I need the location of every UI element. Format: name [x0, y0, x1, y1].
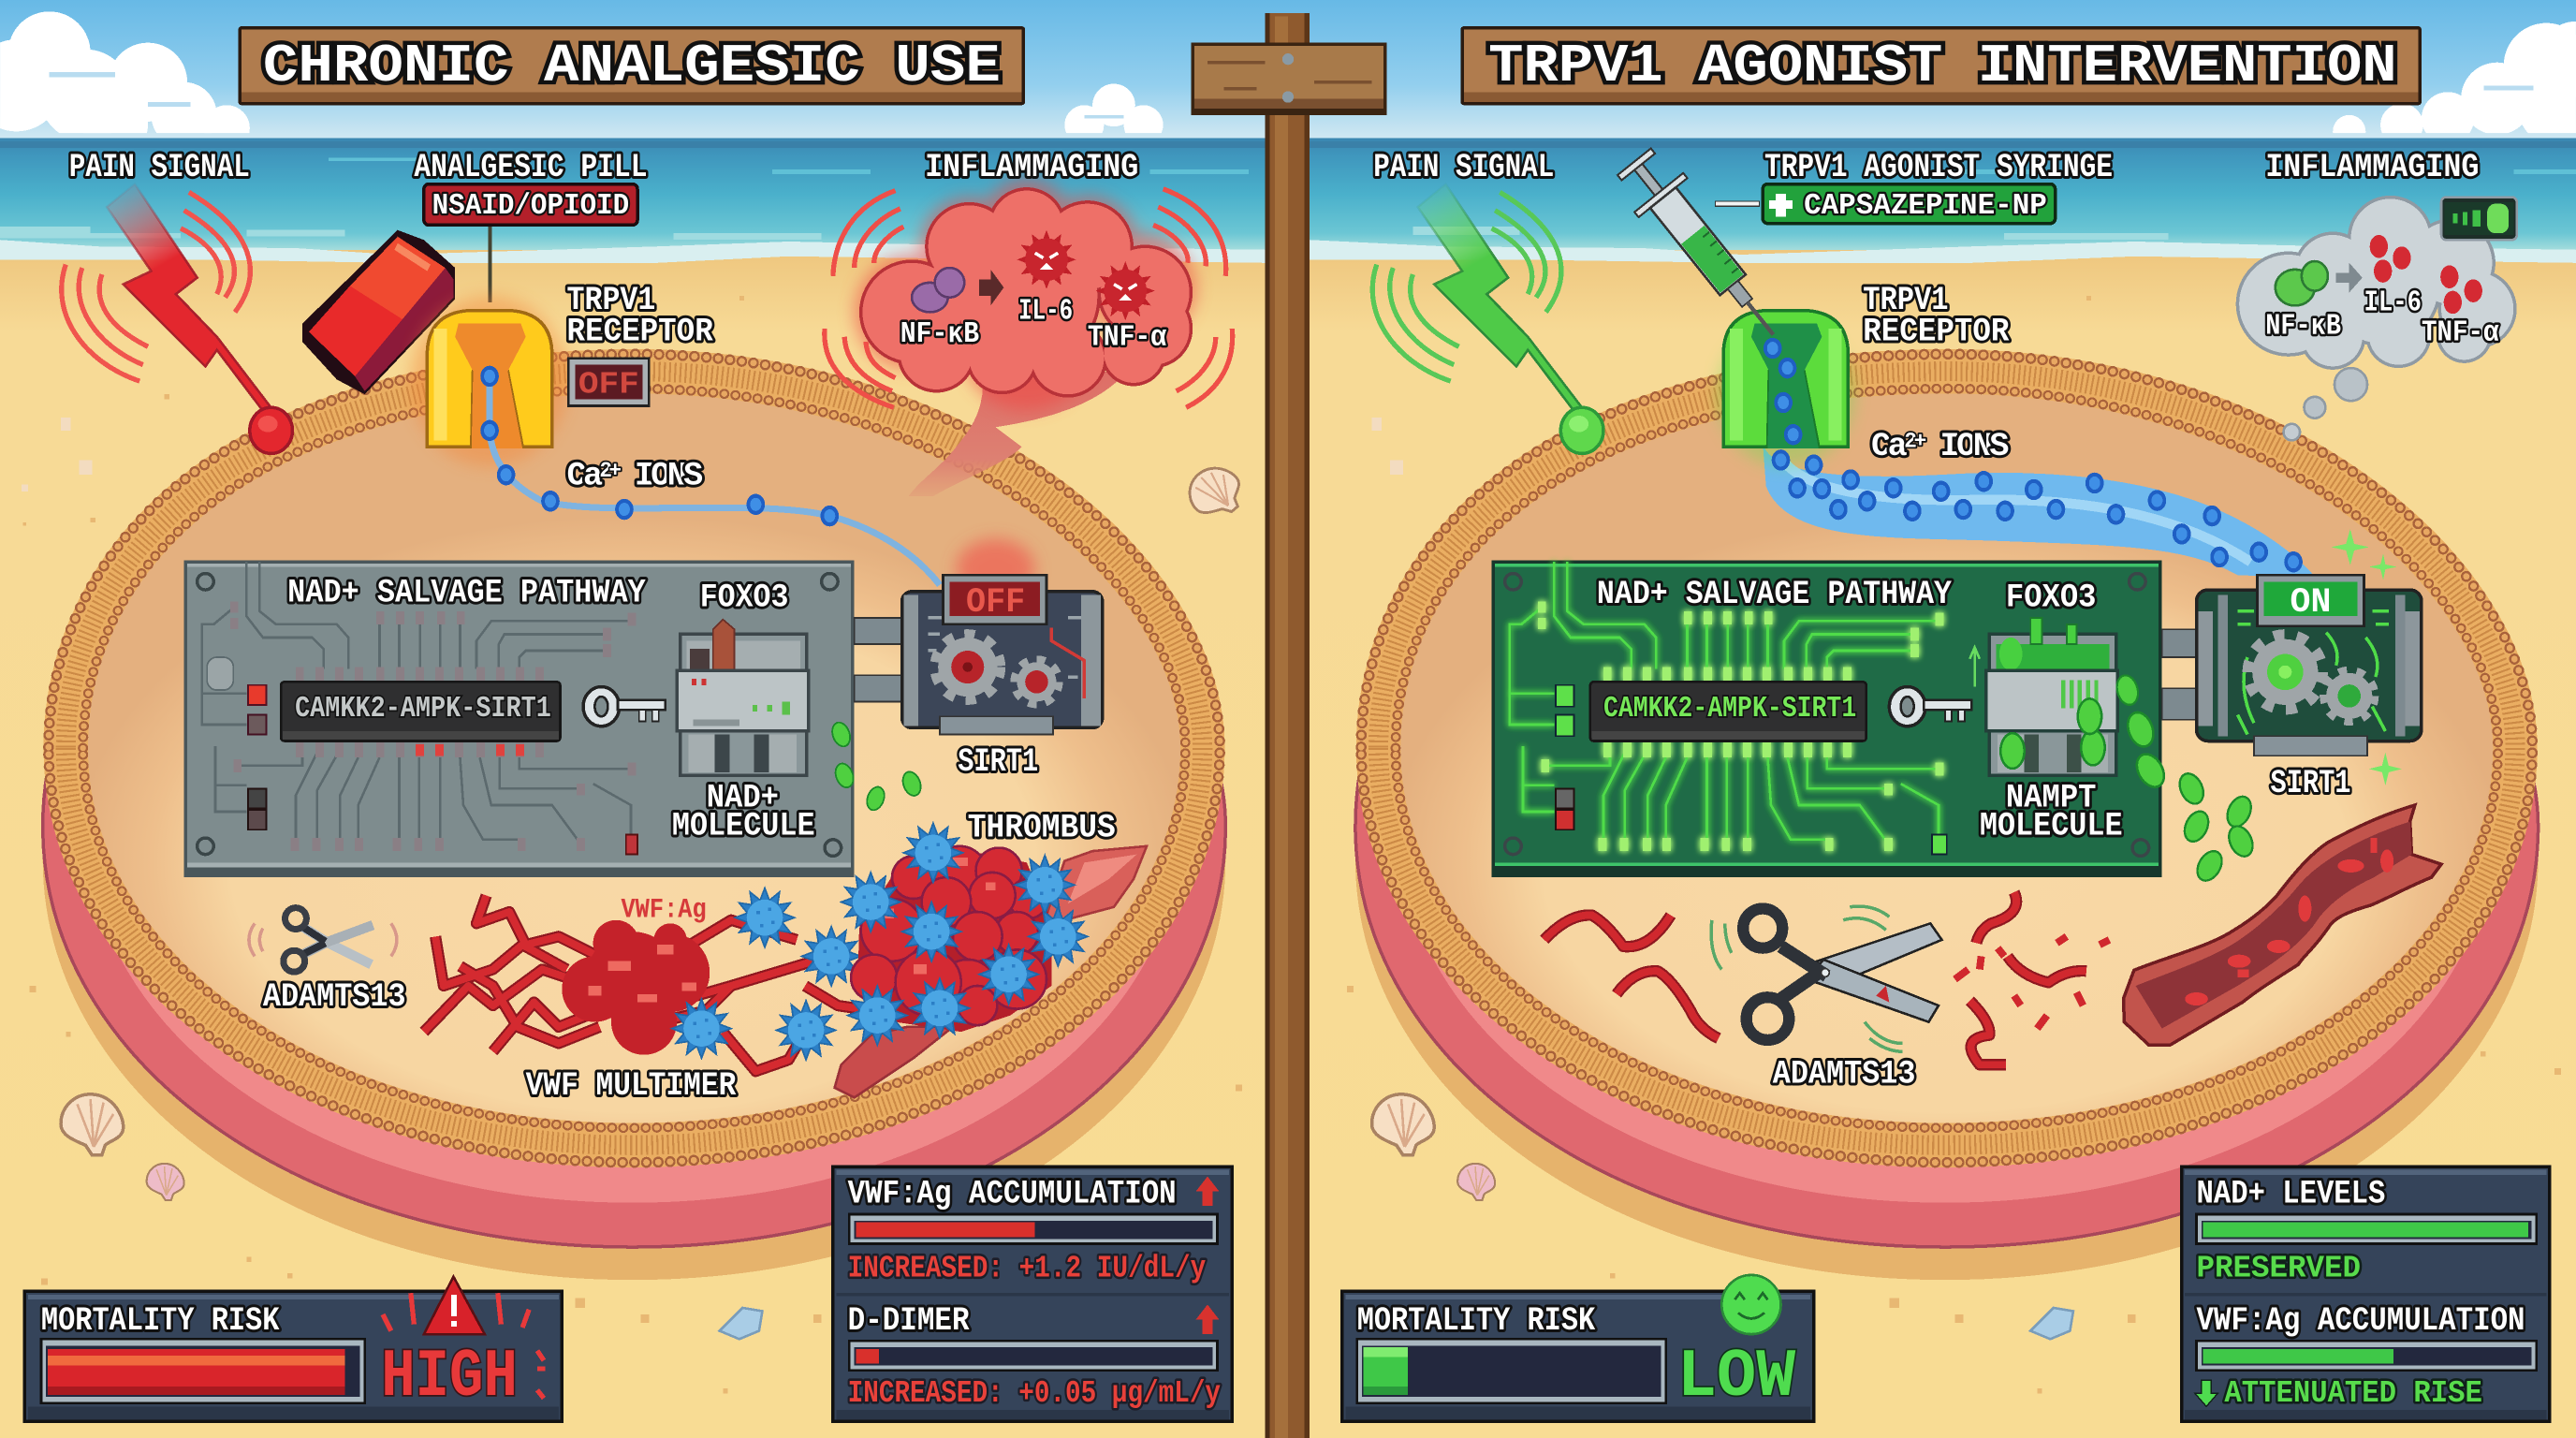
chip: CAMKK2-AMPK-SIRT1: [281, 682, 561, 741]
status: mortality risk high: [24, 1277, 562, 1421]
label: NAD+ molecule: MOLECULE: [672, 808, 815, 845]
molecules: escaping NAD+: [828, 719, 925, 814]
label: TNF-alpha: TNF-α: [1088, 322, 1166, 355]
label: VWF accumulation: VWF:Ag ACCUMULATION: [848, 1176, 1177, 1213]
cloud: inflammaging grey: [2236, 196, 2517, 440]
label: Ca2+ ions: 2+: [1904, 429, 1926, 453]
healthy vessel: [2124, 805, 2441, 1045]
label: NAMPT molecule: [1980, 780, 2123, 845]
title: chronic analgesic use: CHRONIC ANALGESIC USE: [263, 37, 1001, 97]
label: FOXO3: FOXO3: [2006, 580, 2096, 617]
bar: mortality high: [41, 1339, 365, 1403]
icon: IL-6: [1017, 230, 1076, 289]
label: TRPV1 receptor: TRPV1: [1863, 282, 1949, 319]
label: Ca2+ ions: Ca: [567, 458, 603, 495]
icon: low battery: [2441, 198, 2517, 240]
icon: TNF-alpha dots: [2440, 265, 2482, 314]
panel: NAD+ salvage circuit board active: [1492, 560, 2162, 877]
chip: CAMKK2-AMPK-SIRT1: [1590, 682, 1866, 741]
label: TRPV1 receptor: RECEPTOR: [1863, 313, 2010, 350]
arrow: NF-kB to IL-6: [979, 270, 1003, 305]
label: TRPV1 receptor: TRPV1: [567, 282, 655, 319]
label: D-dimer: D-DIMER: [848, 1302, 970, 1340]
label: SIRT1: SIRT1: [2271, 765, 2351, 802]
chip: CAMKK2-AMPK-SIRT1: CAMKK2-AMPK-SIRT1: [1603, 693, 1856, 726]
label: pain signal: PAIN SIGNAL: [1373, 149, 1554, 186]
icon: syringe: [1610, 142, 1797, 355]
arrow: attenuated down: [2195, 1380, 2217, 1406]
icon: key: [583, 687, 666, 726]
value: attenuated rise: ATTENUATED RISE: [2224, 1376, 2482, 1412]
label: NAMPT molecule: MOLECULE: [1980, 808, 2123, 845]
label: TNF-alpha: TNF-α: [2422, 316, 2498, 349]
value: VWF increase: INCREASED: +1.2 IU/dL/y: [848, 1252, 1206, 1287]
label: ADAMTS13: ADAMTS13: [1773, 1056, 1915, 1093]
label: inflammaging: INFLAMMAGING: [925, 149, 1138, 186]
label: SIRT1: SIRT1: [958, 743, 1038, 781]
label: NAD+ molecule: NAD+: [707, 780, 779, 817]
label: HIGH: HIGH: [381, 1339, 518, 1416]
label: VWF:Ag: VWF:Ag: [621, 893, 707, 925]
badge: SIRT1 on: [2257, 575, 2364, 626]
icon: TNF-alpha: [1096, 261, 1155, 320]
badge: SIRT1 on: ON: [2291, 583, 2331, 623]
label: NF-kB: NF-κB: [900, 318, 979, 351]
thrombus: [842, 823, 1088, 1045]
receptor: TRPV1 on: [1717, 311, 1854, 466]
icon: pain signal bolt: [62, 184, 292, 453]
icon: analgesic pill: [302, 230, 455, 394]
strands: cleaved VWF: [1544, 892, 2110, 1064]
icon: gears on: [2249, 636, 2374, 721]
machine: SIRT1 on: [2162, 575, 2422, 756]
bar: VWF: [849, 1214, 1218, 1244]
value: D-dimer increase: INCREASED: +0.05 µg/mL/y: [848, 1376, 1221, 1412]
status: mortality risk low: [1342, 1275, 1814, 1421]
value: preserved: PRESERVED: [2197, 1252, 2361, 1287]
label: NAMPT molecule: NAMPT: [2006, 780, 2096, 817]
decoration: shells and pebble: [1372, 1094, 2073, 1339]
label: Ca2+ ions: IONS: [618, 458, 703, 495]
label: thrombus: THROMBUS: [968, 809, 1116, 846]
label: LOW: LOW: [1677, 1339, 1796, 1416]
label: VWF multimer: VWF MULTIMER: [526, 1067, 737, 1105]
label: TRPV1 receptor: [567, 282, 714, 350]
badge: SIRT1 off: [943, 575, 1046, 624]
label: VWF accumulation: VWF:Ag ACCUMULATION: [2197, 1302, 2525, 1340]
label: pathway title: NAD+ SALVAGE PATHWAY: [1597, 576, 1952, 613]
panel: chronic analgesic use: [24, 149, 1251, 1421]
icon: warning triangle: [383, 1277, 546, 1399]
decoration: shells and pebble: [61, 457, 1251, 1339]
river: calcium ion flow: [1763, 444, 2317, 579]
label: inflammaging: INFLAMMAGING: [2265, 149, 2479, 186]
label: IL-6: IL-6: [1018, 295, 1073, 328]
icon: key: [1889, 687, 1971, 726]
panel: NAD+ salvage circuit board: [184, 560, 855, 877]
badge: SIRT1 off: OFF: [966, 583, 1025, 623]
module: FOXO3 locked: [677, 620, 809, 775]
bar: NAD+ levels: [2197, 1214, 2537, 1244]
ions: dense calcium beads: [1764, 338, 2303, 572]
bar: VWF attenuated: [2197, 1341, 2537, 1371]
icon: active scissors: [1711, 906, 1942, 1051]
label: Ca2+ ions: IONS: [1924, 428, 2009, 465]
bar: mortality low: [1357, 1339, 1666, 1403]
badge: receptor off: OFF: [578, 367, 639, 403]
label: syringe: TRPV1 AGONIST SYRINGE: [1764, 149, 2113, 186]
label: TRPV1 receptor: RECEPTOR: [567, 313, 714, 350]
badge: receptor off: [568, 359, 649, 405]
status: NAD+ levels and VWF: [2182, 1167, 2550, 1421]
label: TRPV1 receptor: [1863, 282, 2010, 350]
callout: capsazepine-np: [1715, 184, 2056, 224]
label: Ca2+ ions: Ca: [1871, 428, 1908, 465]
thrombus vessel: [835, 846, 1147, 1097]
label: FOXO3: FOXO3: [700, 580, 788, 617]
ions: sparse calcium trail: [480, 366, 940, 585]
label: NAD+ molecule: [672, 780, 815, 845]
sparkles: [2331, 529, 2402, 785]
label: pain signal: PAIN SIGNAL: [69, 149, 250, 186]
vwf multimer tangle: [424, 888, 871, 1071]
label: pathway title: NAD+ SALVAGE PATHWAY: [287, 574, 646, 611]
icon: IL-6 dots: [2370, 235, 2411, 283]
panel: TRPV1 agonist intervention: [1342, 142, 2550, 1421]
icon: idle scissors: [249, 908, 397, 972]
icon: NF-kB green: [2276, 261, 2328, 305]
label: mortality risk: MORTALITY RISK: [1357, 1302, 1596, 1340]
callout: NSAID/OPIOID: NSAID/OPIOID: [432, 190, 629, 223]
callout: capsazepine-np: CAPSAZEPINE-NP: [1804, 190, 2047, 223]
label: IL-6: IL-6: [2364, 287, 2422, 320]
module: NAMPT active: [1969, 618, 2117, 775]
machine: SIRT1 off: [855, 539, 1103, 734]
arrow: VWF up: [1196, 1177, 1219, 1206]
cell: left membrane disc: [49, 354, 1220, 1257]
receptor: TRPV1 off: [411, 296, 568, 466]
label: mortality risk: MORTALITY RISK: [41, 1302, 280, 1340]
label: analgesic pill: ANALGESIC PILL: [414, 149, 648, 186]
chip: CAMKK2-AMPK-SIRT1: CAMKK2-AMPK-SIRT1: [295, 693, 551, 726]
label: NAD+ levels: NAD+ LEVELS: [2197, 1176, 2385, 1213]
title: TRPV1 agonist intervention: [1460, 26, 2422, 105]
icon: smiley: [1721, 1275, 1781, 1334]
icon: pain signal bolt green: [1372, 184, 1603, 453]
status: VWF and D-dimer: [833, 1167, 1232, 1421]
signpost: wooden post: [1191, 13, 1386, 1438]
title: chronic analgesic use: [239, 26, 1025, 105]
label: Ca2+ ions: 2+: [599, 459, 622, 483]
cloud: inflammaging red: [825, 179, 1233, 496]
label: ADAMTS13: ADAMTS13: [263, 978, 406, 1016]
arrow: NF-kB to IL-6: [2336, 263, 2363, 292]
arrow: D-dimer up: [1196, 1304, 1219, 1334]
cell: right membrane disc: [1361, 354, 2532, 1257]
icon: gears off: [936, 636, 1058, 703]
title: TRPV1 agonist intervention: TRPV1 AGONIST INTERVENTION: [1488, 37, 2397, 97]
stem: pill callout line: [488, 224, 492, 302]
molecules: NAD+ stream: [2113, 671, 2259, 887]
bar: D-dimer: [849, 1341, 1218, 1371]
label: NF-kB: NF-κB: [2265, 310, 2341, 343]
icon: NF-kB: [912, 268, 964, 312]
